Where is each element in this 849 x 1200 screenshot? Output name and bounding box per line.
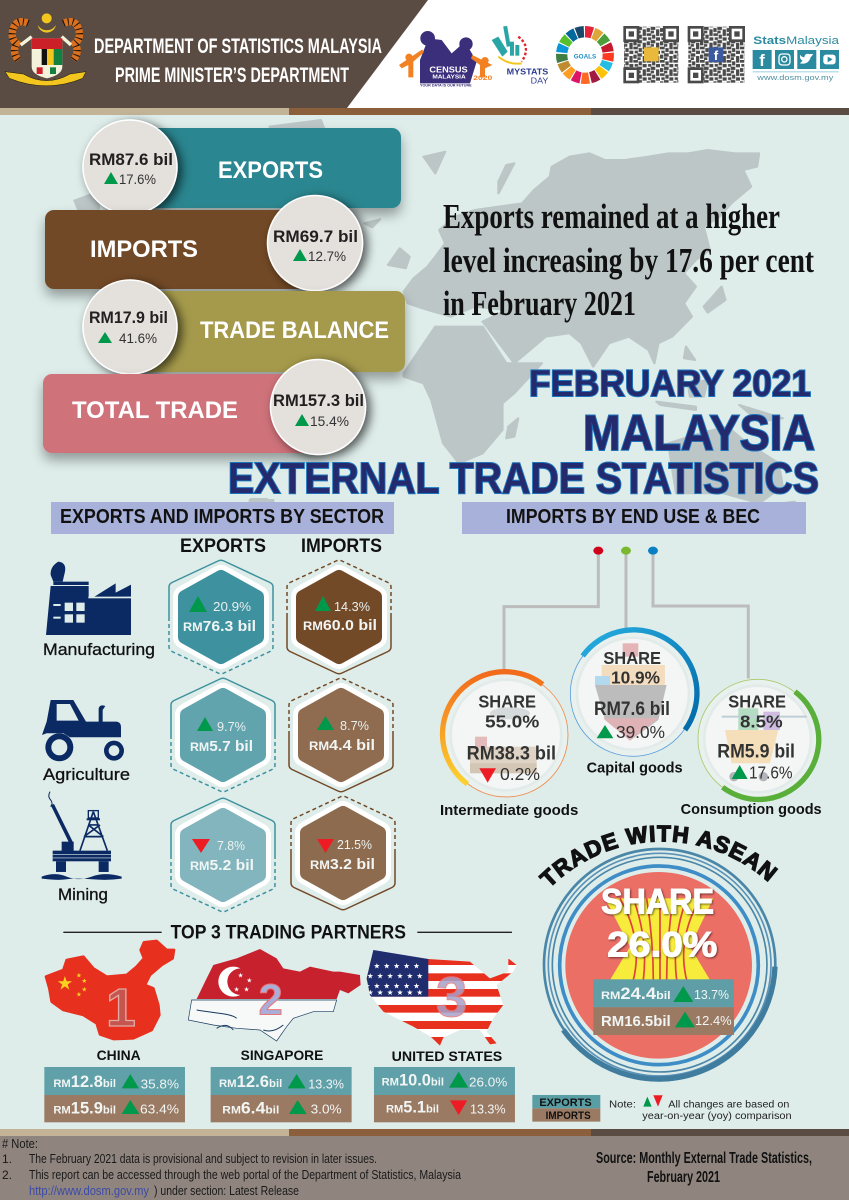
logo: census 2020: YOUR DATA IS OUR FUTURE	[420, 84, 473, 88]
notes: 2.	[2, 1168, 12, 1182]
circle: consumption goods: 8.5%	[740, 711, 783, 731]
heading: exports and imports by sector	[51, 502, 394, 534]
ministry name: PRIME MINISTER’S DEPARTMENT	[115, 64, 349, 87]
circle: capital goods: SHARE	[603, 648, 661, 668]
logo: mystats day: MYSTATS	[507, 66, 549, 76]
tricolour strip top	[0, 108, 849, 115]
imports label: IMPORTS	[90, 236, 198, 263]
world map background	[206, 120, 795, 530]
circle: intermediate goods: 0.2%	[500, 764, 540, 784]
share value	[601, 882, 717, 965]
map: Singapore: ★	[246, 976, 252, 984]
share value: SHARE	[601, 882, 714, 921]
red disc	[565, 872, 752, 1059]
map: Singapore: ★	[234, 985, 240, 993]
StatsMalaysia wordmark: StatsMalaysia	[753, 35, 840, 47]
trade balance value circle	[83, 280, 177, 374]
exports row: RM24.4bil	[601, 984, 671, 1003]
circle: consumption goods: RM5.9 bil	[717, 741, 795, 762]
circle: capital goods: 10.9%	[611, 667, 660, 687]
map: United States: ★★★★★★	[364, 981, 423, 990]
panel: exports	[83, 120, 401, 214]
circle: consumption goods: 17.6%	[749, 762, 793, 782]
circle: capital goods: RM7.6 bil	[594, 699, 670, 720]
legend: EXPORTS	[539, 1097, 592, 1109]
hexagon: mining imports: RM3.2 bil	[310, 856, 375, 873]
panel: imports by end use	[440, 547, 822, 819]
legend	[532, 1095, 600, 1122]
map: China: ★	[57, 973, 73, 994]
notes: 1.	[2, 1152, 12, 1166]
total trade label: TOTAL TRADE	[72, 397, 238, 424]
circle: intermediate goods	[443, 672, 568, 797]
heading: exports and imports by sector: EXPORTS AND IMPORTS BY SECTOR	[60, 506, 384, 528]
total trade value circle	[270, 360, 366, 454]
panel: trade with ASEAN	[532, 825, 792, 1122]
QR code: facebook	[688, 27, 744, 83]
trade balance label: TRADE BALANCE	[200, 317, 389, 344]
map: Singapore: 2	[259, 976, 283, 1024]
table: China: RM12.8bil	[53, 1072, 116, 1091]
table: China: 35.8%	[141, 1077, 179, 1091]
imports value circle	[268, 196, 362, 290]
notes: The February 2021 data is provisional and subject to revision in later issues.	[29, 1151, 377, 1166]
map: China	[46, 941, 174, 1039]
title: MALAYSIA	[583, 405, 815, 461]
logo: mystats day: DAY	[531, 76, 549, 86]
website address: www.dosm.gov.my	[756, 75, 834, 82]
logo: mystats day	[492, 26, 549, 86]
QR codes and social links	[624, 27, 840, 83]
hexagon: manufacturing imports: RM60.0 bil	[303, 617, 377, 634]
imports value circle: 12.7%	[308, 248, 346, 264]
label: capital goods: Capital goods	[587, 760, 683, 777]
column heading: exports: EXPORTS	[180, 536, 266, 557]
heading: imports by end use: IMPORTS BY END USE & BEC	[506, 506, 760, 528]
label: United States: UNITED STATES	[392, 1048, 502, 1064]
map: China: 1	[106, 979, 136, 1038]
circle: intermediate goods: SHARE	[478, 691, 536, 711]
source: February 2021	[647, 1169, 720, 1186]
imports row: 12.4%	[695, 1013, 732, 1028]
logo: sustainable development goals wheel	[552, 22, 618, 88]
map: China: ★	[81, 977, 87, 985]
hexagon: agriculture imports: RM4.4 bil	[309, 737, 375, 754]
trade balance value circle: RM17.9 bil	[89, 308, 168, 327]
hexagon: mining exports: 7.8%	[217, 838, 245, 853]
map: United States: ★★★★★★	[364, 961, 423, 970]
footer panel	[0, 1136, 849, 1200]
table: United States: 26.0%	[469, 1076, 507, 1090]
concentric rings	[544, 849, 775, 1080]
map: China: ★	[81, 985, 87, 993]
label: China: CHINA	[97, 1047, 141, 1063]
header white background	[0, 0, 849, 108]
hexagon: agriculture imports	[289, 678, 393, 792]
ASEAN emblem	[605, 898, 713, 980]
QR code: facebook: f	[714, 48, 719, 63]
notes: http://www.dosm.gov.my	[29, 1183, 149, 1198]
circle: consumption goods	[698, 679, 819, 799]
hexagon: mining exports: RM5.2 bil	[190, 857, 254, 874]
table: Singapore: RM6.4bil	[222, 1099, 279, 1118]
map: United States: ★★★★★★	[367, 988, 426, 997]
table: China	[44, 1067, 185, 1122]
headline	[443, 197, 814, 323]
map: Singapore: ★	[244, 985, 250, 993]
note: year-on-year (yoy) comparison	[642, 1111, 792, 1122]
label: intermediate goods: Intermediate goods	[440, 802, 578, 819]
exports row: 13.7%	[694, 987, 729, 1002]
map fragment: Americas	[73, 190, 268, 508]
table: Singapore: RM12.6bil	[219, 1072, 282, 1091]
indicator dots	[593, 547, 658, 555]
note: Note:	[609, 1099, 636, 1110]
label: Singapore: SINGAPORE	[241, 1047, 323, 1063]
circle: capital goods	[570, 630, 697, 756]
logo: census 2020: MALAYSIA	[432, 75, 466, 81]
social icons: f	[759, 51, 765, 70]
QR code: website	[624, 27, 678, 83]
hexagon: manufacturing exports	[169, 560, 273, 674]
tricolour strip bottom	[0, 1129, 849, 1136]
table: Singapore	[211, 1067, 352, 1122]
hexagon: agriculture exports: RM5.7 bil	[190, 738, 253, 755]
panel: total trade	[43, 360, 366, 454]
map: United States: ★★★★★★	[367, 971, 426, 980]
circle: consumption goods: SHARE	[728, 691, 786, 711]
notes	[2, 1136, 462, 1198]
label: mining: Mining	[58, 885, 108, 904]
connector lines	[504, 553, 748, 678]
department name: DEPARTMENT OF STATISTICS MALAYSIA	[94, 35, 382, 58]
hexagon: agriculture imports: 8.7%	[340, 718, 369, 733]
notes: This report can be accessed through the web portal of the Department of Statistics, Malaysia	[29, 1167, 462, 1182]
exports value circle	[83, 120, 177, 214]
table: United States	[374, 1067, 515, 1122]
headline: in February 2021	[443, 284, 636, 323]
hexagon: manufacturing exports: 20.9%	[213, 599, 251, 614]
map: United States	[363, 948, 520, 1048]
logo: census 2020	[399, 31, 493, 88]
label: agriculture: Agriculture	[43, 765, 130, 784]
circle: capital goods: 39.0%	[616, 722, 665, 742]
hexagon: manufacturing imports	[287, 560, 391, 674]
source	[596, 1150, 812, 1186]
table: United States: 13.3%	[470, 1102, 506, 1116]
logo: sustainable development goals wheel: GOALS	[574, 53, 596, 60]
map: United States: 3	[436, 967, 467, 1030]
share value: 26.0%	[607, 926, 717, 965]
heading: TOP 3 TRADING PARTNERS	[171, 922, 406, 943]
circle: intermediate goods: 55.0%	[485, 711, 539, 731]
icon: oil rig	[42, 792, 122, 880]
circular title: TRADE WITH ASEAN	[538, 825, 778, 886]
table: United States: RM5.1bil	[386, 1097, 439, 1116]
hexagon: mining imports: 21.5%	[337, 837, 372, 852]
table: China: RM15.9bil	[53, 1099, 116, 1118]
panel: top 3 trading partners	[44, 922, 520, 1122]
header band	[0, 0, 428, 108]
heading: imports by end use	[462, 502, 806, 534]
column heading: imports: IMPORTS	[301, 536, 382, 557]
imports row: RM16.5bil	[601, 1014, 671, 1030]
title: FEBRUARY 2021	[529, 363, 811, 404]
hexagon: mining imports	[291, 796, 395, 910]
hexagon: manufacturing imports: 14.3%	[334, 599, 370, 614]
legend: IMPORTS	[546, 1110, 591, 1122]
note	[609, 1095, 792, 1122]
icon: factory	[46, 562, 131, 635]
table: United States: RM10.0bil	[382, 1071, 444, 1090]
exports value circle: 17.6%	[119, 171, 156, 187]
panel: imports	[45, 196, 362, 290]
note: All changes are based on	[668, 1100, 789, 1111]
map: Singapore: ★	[238, 971, 244, 979]
hexagon: mining exports	[171, 798, 275, 912]
exports row	[593, 979, 734, 1007]
total trade value circle: RM157.3 bil	[273, 391, 364, 410]
title	[228, 363, 819, 503]
hexagon: agriculture exports	[171, 678, 275, 792]
table: Singapore: 13.3%	[308, 1077, 344, 1091]
logo: census 2020: CENSUS	[429, 65, 468, 74]
notes: # Note:	[2, 1136, 38, 1151]
exports label: EXPORTS	[218, 157, 323, 184]
logos row	[399, 22, 618, 88]
table: China: 63.4%	[140, 1103, 179, 1117]
imports row	[593, 1007, 734, 1035]
map: China: ★	[76, 991, 82, 999]
label: manufacturing: Manufacturing	[43, 640, 155, 659]
map: Singapore	[188, 949, 361, 1041]
total trade value circle: 15.4%	[310, 413, 349, 429]
imports value circle: RM69.7 bil	[273, 227, 358, 246]
notes: ) under section: Latest Release	[154, 1183, 299, 1198]
map: China: ★	[76, 971, 82, 979]
trade balance value circle: 41.6%	[119, 330, 157, 346]
logo: census 2020: 2020	[473, 75, 493, 82]
circle: intermediate goods: RM38.3 bil	[467, 743, 556, 764]
exports value circle: RM87.6 bil	[89, 150, 173, 169]
icon: tractor	[42, 700, 124, 761]
icon: national coat of arms	[5, 13, 86, 86]
label: consumption goods: Consumption goods	[681, 801, 822, 818]
table: Singapore: 3.0%	[311, 1102, 342, 1116]
social icons	[753, 50, 839, 72]
hexagon: manufacturing exports: RM76.3 bil	[183, 618, 256, 635]
panel: trade balance	[83, 280, 405, 374]
hexagon: agriculture exports: 9.7%	[217, 719, 246, 734]
